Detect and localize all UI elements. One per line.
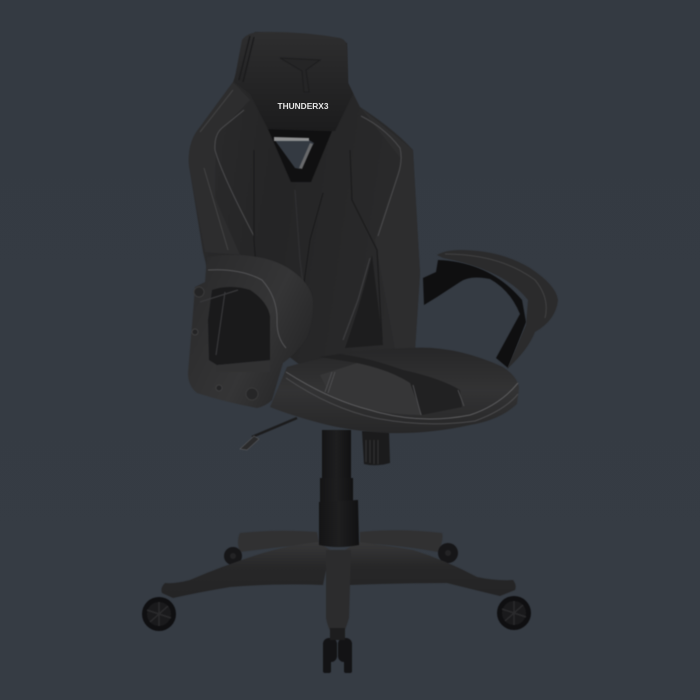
- brand name: THUNDERX3: [278, 101, 329, 111]
- chair base: [142, 418, 531, 673]
- seat cushion: [270, 348, 519, 433]
- backrest: [189, 32, 420, 365]
- side bolster right: [360, 107, 420, 350]
- height lever: [240, 418, 297, 450]
- armrest window backing: [208, 287, 270, 365]
- base: centre leg: [326, 550, 351, 634]
- gas lift column: [319, 430, 359, 547]
- seat centre band: [320, 354, 462, 415]
- armrest stitching: [208, 270, 286, 348]
- seat stitching: [286, 372, 518, 419]
- base: rear legs: [238, 530, 442, 552]
- dark central darts: [345, 255, 383, 348]
- mechanism strut: [200, 290, 238, 355]
- caster: front: [323, 628, 352, 673]
- caster: rear right: [438, 543, 458, 563]
- side bolster left: [189, 82, 250, 255]
- base: front right leg: [345, 542, 516, 596]
- near armrest: [188, 255, 313, 408]
- far armrest pad: [437, 250, 558, 369]
- headrest: [234, 32, 353, 131]
- caster: front left: [142, 597, 176, 631]
- bolts: [194, 287, 204, 297]
- adjustment knob: [362, 431, 390, 465]
- stitching lines: [200, 90, 401, 250]
- logo emblem: [280, 58, 320, 92]
- caster: front right: [497, 596, 531, 630]
- centre panel seams: [254, 150, 382, 345]
- lower window ledge: [216, 361, 270, 372]
- headrest slot: [268, 129, 332, 182]
- caster: rear left: [224, 547, 242, 565]
- far armrest support: [423, 260, 526, 368]
- base: front left leg: [161, 542, 330, 598]
